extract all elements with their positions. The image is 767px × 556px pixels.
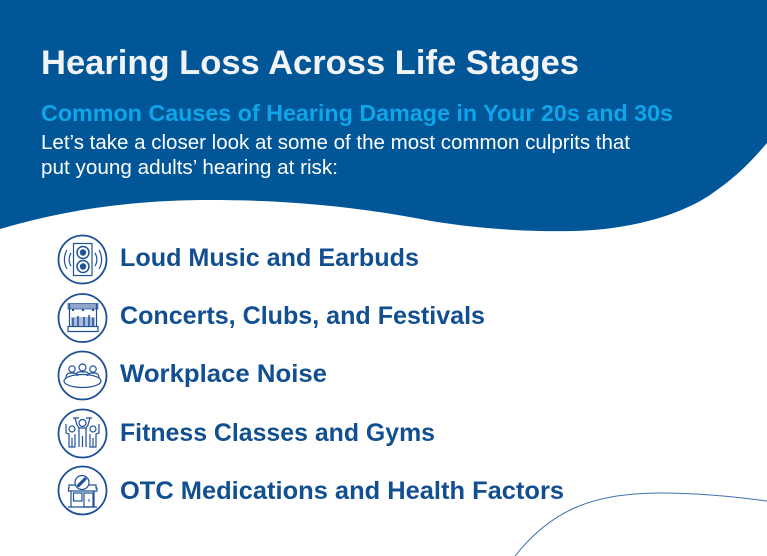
intro text: Let’s take a closer look at some of the most common culprits that — [41, 132, 630, 154]
label: Fitness Classes and Gyms — [120, 419, 435, 447]
icon: pharmacy — [58, 466, 106, 514]
label: Concerts, Clubs, and Festivals — [120, 302, 485, 330]
label: Workplace Noise — [120, 360, 327, 388]
icon: stage — [58, 294, 106, 342]
subtitle: Common Causes of Hearing Damage in Your 20s and 30s — [41, 100, 673, 126]
decorative curve — [515, 493, 767, 556]
list item: OTC — [58, 466, 564, 514]
icon: group exercising — [58, 410, 106, 458]
intro text: put young adults’ hearing at risk: — [41, 157, 338, 179]
icon: speaker — [58, 236, 106, 284]
header background — [0, 0, 767, 231]
list item: loud music — [58, 236, 419, 284]
icon: meeting table — [58, 352, 106, 400]
list item: workplace — [58, 352, 327, 400]
label: Loud Music and Earbuds — [120, 244, 419, 272]
intro text — [41, 132, 630, 179]
title: Hearing Loss Across Life Stages — [41, 44, 579, 82]
label: OTC Medications and Health Factors — [120, 477, 564, 505]
list item: fitness — [58, 410, 435, 458]
list item: concerts — [58, 294, 485, 342]
